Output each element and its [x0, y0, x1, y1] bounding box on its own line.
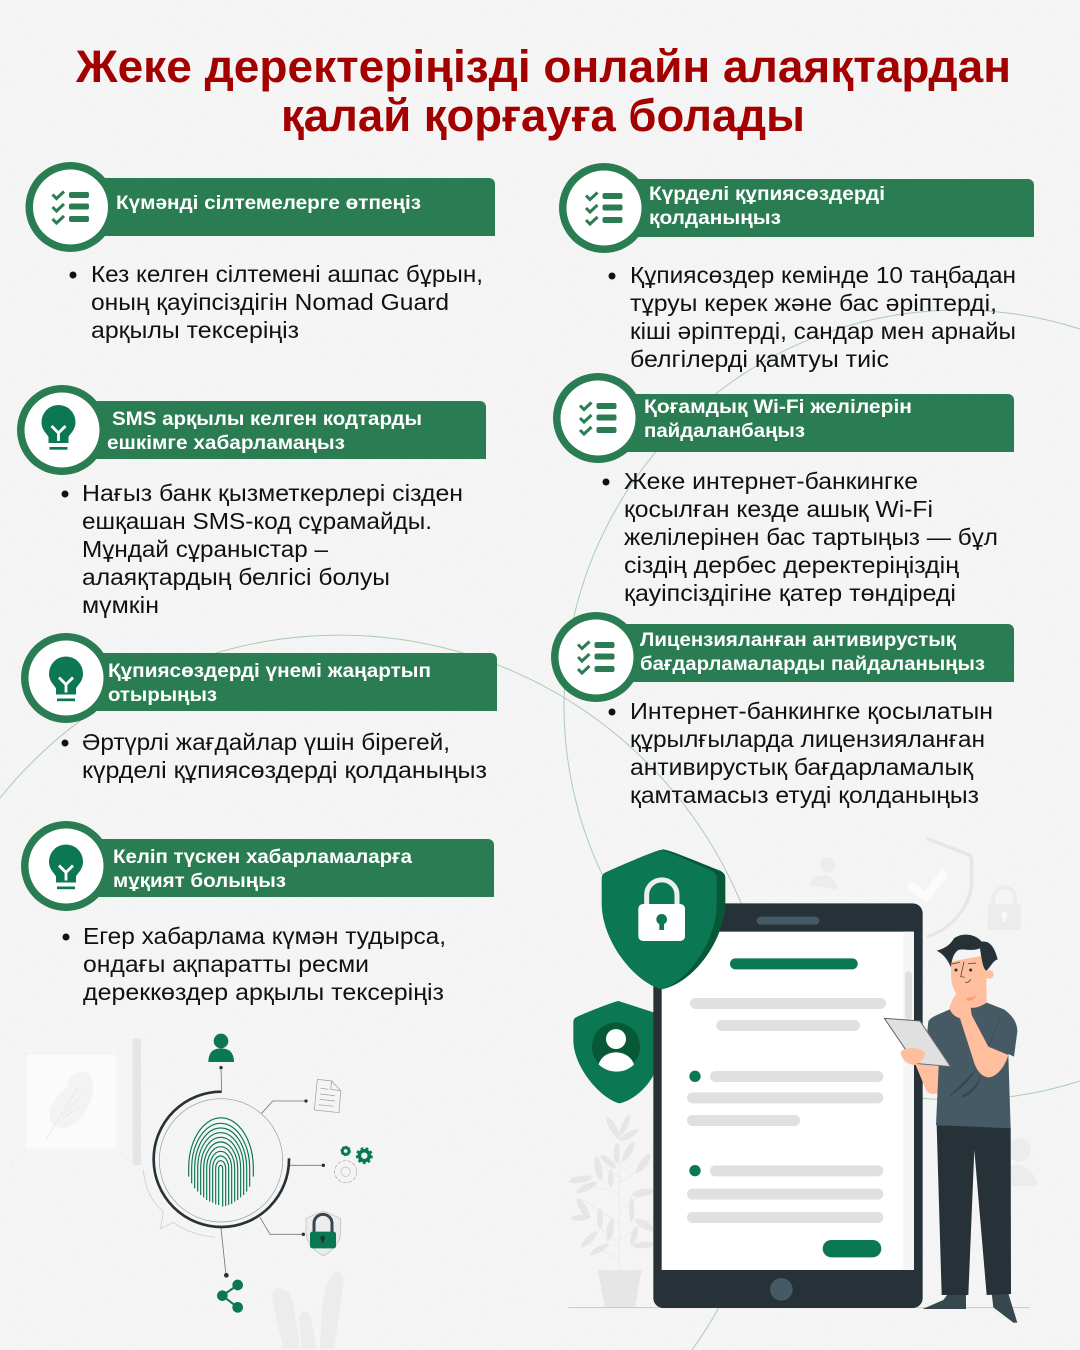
scanner ring	[154, 1092, 289, 1227]
left forearm	[915, 1063, 939, 1094]
hair	[937, 935, 998, 971]
panel: public wi-fi: сіздің дербес деректеріңіздің	[624, 552, 959, 578]
illustration: tablet, shields and man	[568, 838, 1038, 1323]
panel: update passwords: отырыңыз	[108, 684, 217, 706]
panel: public wi-fi: қауіпсіздігіне қатер төндіреді	[624, 580, 956, 606]
shirt folds	[948, 1016, 1001, 1097]
panel: SMS codes: Мұндай сұраныстар –	[82, 536, 329, 562]
faint picture frame	[10, 1038, 141, 1165]
panel: complex passwords: қолданыңыз	[649, 207, 781, 229]
panel: incoming messages	[21, 821, 494, 1005]
panel: licensed antivirus	[551, 612, 1014, 808]
panel: complex passwords: белгілерді қамтуы тиіс	[630, 346, 889, 372]
panel: licensed antivirus: Интернет-банкингке қосылатын	[630, 698, 993, 724]
faint cactus	[272, 1272, 343, 1348]
panel: complex passwords: Құпиясөздер кемінде 10 таңбадан	[630, 262, 1016, 288]
title	[75, 41, 1011, 141]
panel: complex passwords: Күрделі құпиясөздерді	[649, 183, 885, 205]
panel: licensed antivirus: қамтамасыз етуді қолданыңыз	[630, 782, 979, 808]
panel: SMS codes: ешқашан SMS-код сұрамайды.	[82, 508, 432, 534]
title: қалай қорғауға болады	[281, 90, 805, 141]
neck and face	[951, 955, 987, 1008]
raised arm	[949, 991, 1008, 1077]
panel: public wi-fi: қосылған кезде ашық Wi-Fi	[624, 496, 933, 522]
panel: SMS codes: мүмкін	[82, 592, 159, 618]
man thinking with tablet	[884, 935, 1017, 1323]
panel: SMS codes: ешкімге хабарламаңыз	[107, 432, 345, 454]
panel: licensed antivirus: Лицензияланған антивирустық	[640, 629, 956, 651]
panel: licensed antivirus: бағдарламаларды пайдаланыңыз	[640, 653, 985, 675]
faint lock	[988, 887, 1021, 930]
shoes	[923, 1293, 1017, 1323]
upper body	[884, 935, 1017, 1128]
panel: suspicious links	[26, 162, 495, 343]
panel: suspicious links: арқылы тексеріңіз	[91, 317, 299, 343]
panel: incoming messages: дереккөздер арқылы тексеріңіз	[83, 979, 444, 1005]
panel: update passwords: Әртүрлі жағдайлар үшін бірегей,	[82, 729, 450, 755]
fingerprint	[189, 1118, 253, 1207]
panel: update passwords	[21, 633, 497, 783]
shirt	[927, 1003, 1017, 1128]
panel: SMS codes: Нағыз банк қызметкерлері сізден	[82, 480, 463, 506]
panel: suspicious links: оның қауіпсіздігін Nomad Guard	[91, 289, 449, 315]
panel: incoming messages: Келіп түскен хабарламаларға	[113, 846, 412, 868]
faint person	[810, 857, 1038, 1186]
icon: share	[217, 1280, 243, 1313]
panel: complex passwords: тұруы керек және бас әріптерді,	[630, 290, 997, 316]
icon: person	[208, 1034, 234, 1062]
tablet	[653, 903, 923, 1308]
hand	[901, 1048, 925, 1065]
panel: suspicious links: Кез келген сілтемені ашпас бұрын,	[91, 261, 483, 287]
icon: document	[314, 1079, 341, 1113]
connector dots	[219, 1066, 325, 1278]
small shield with person	[573, 1001, 657, 1103]
big shield with lock	[602, 849, 725, 989]
panel: update passwords: Құпиясөздерді үнемі жаңартып	[108, 660, 431, 682]
faint plant	[568, 1114, 657, 1308]
speech bubble outline	[143, 1170, 215, 1237]
connector lines	[221, 1068, 323, 1275]
panel: update passwords: күрделі құпиясөздерді қолданыңыз	[82, 757, 487, 783]
trousers	[937, 1125, 1011, 1295]
panel: SMS codes	[17, 385, 486, 618]
eyes and nose	[952, 962, 976, 982]
panel: complex passwords: кіші әріптерді, сандар мен арнайы	[630, 318, 1016, 344]
panel: public wi-fi: желілерінен бас тартыңыз — бұл	[624, 524, 998, 550]
icon: shield lock	[306, 1211, 341, 1256]
faint background shield with check	[908, 838, 972, 937]
panel: suspicious links: Күмәнді сілтемелерге өтпеңіз	[116, 192, 421, 214]
illustration: fingerprint security diagram	[10, 1034, 372, 1348]
panel: licensed antivirus: құрылғыларда лицензияланған	[630, 726, 985, 752]
panel: public wi-fi: Қоғамдық Wi-Fi желілерін	[644, 396, 912, 418]
panel: complex passwords	[559, 163, 1034, 372]
panel: public wi-fi: пайдаланбаңыз	[644, 420, 805, 442]
tablet in hand	[884, 1018, 951, 1067]
panel: incoming messages: ондағы ақпаратты ресми	[83, 951, 369, 977]
panel: public wi-fi	[553, 373, 1014, 606]
panel: incoming messages: мұқият болыңыз	[113, 870, 286, 892]
panel: SMS codes: SMS арқылы келген кодтарды	[112, 408, 422, 430]
icon: gears	[335, 1147, 372, 1183]
panel: SMS codes: алаяқтардың белгісі болуы	[82, 564, 390, 590]
ground line	[568, 1306, 1030, 1309]
panel: incoming messages: Егер хабарлама күмән тудырса,	[83, 923, 446, 949]
panel: licensed antivirus: антивирустық бағдарламалық	[630, 754, 974, 780]
title: Жеке деректеріңізді онлайн алаяқтардан	[75, 41, 1011, 92]
panel: public wi-fi: Жеке интернет-банкингке	[624, 468, 918, 494]
